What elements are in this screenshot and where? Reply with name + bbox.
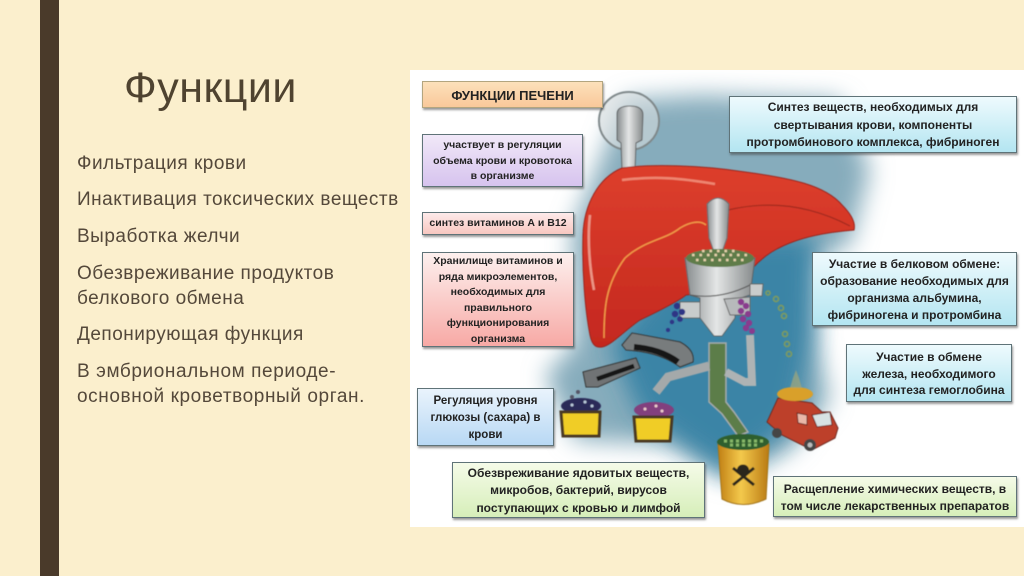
callout: iron metabolism: железа, необходимого <box>862 367 996 381</box>
list item: Обезвреживание продуктов <box>77 263 334 284</box>
callout: iron metabolism: Участие в обмене <box>876 350 982 364</box>
icon: funnel <box>680 249 763 336</box>
icon: crate with blue sugar <box>561 390 601 436</box>
callout: coagulation synthesis <box>729 96 1017 153</box>
icon: pipes <box>656 335 752 436</box>
icon: conveyor lower <box>583 358 640 387</box>
callout: protein metabolism: образование необходимых для <box>820 274 1009 288</box>
callout: vitamin storage <box>422 252 574 347</box>
callout: iron metabolism: для синтеза гемоглобина <box>853 383 1004 397</box>
callout: protein metabolism <box>812 252 1017 326</box>
icon: green droplets <box>766 291 792 356</box>
liver <box>583 166 854 347</box>
list item <box>77 263 334 308</box>
callout: coagulation synthesis: свертывания крови, компоненты <box>774 118 972 132</box>
icon: inner valve <box>707 198 729 252</box>
callout: vitamin synthesis <box>422 212 574 235</box>
callout: glucose regulation <box>417 388 554 446</box>
list item: Депонирующая функция <box>77 324 304 345</box>
icon: crate with purple sugar <box>634 402 674 441</box>
callout: chemical breakdown: Расщепление химических веществ, в <box>784 482 1006 496</box>
icon: conveyor upper <box>622 333 693 367</box>
callout: protein metabolism: организма альбумина, <box>847 291 982 305</box>
callout: blood volume regulation: в организме <box>471 170 534 182</box>
callout: chemical breakdown <box>773 476 1017 517</box>
text block: list of functions <box>77 153 399 406</box>
list item: белкового обмена <box>77 288 244 308</box>
callout: vitamin storage: Хранилище витаминов и <box>433 255 563 267</box>
list item <box>77 361 365 406</box>
icon: red truck <box>767 370 838 451</box>
callout: detoxification: Обезвреживание ядовитых веществ, <box>468 466 689 480</box>
callout: blood volume regulation: объема крови и кровотока <box>433 155 572 167</box>
callout: coagulation synthesis: протромбинового комплекса, фибриноген <box>747 135 999 149</box>
callout: chemical breakdown: том числе лекарственных препаратов <box>781 498 1009 512</box>
list item: основной кроветворный орган. <box>77 386 365 406</box>
liver illustration <box>533 78 884 506</box>
callout: protein metabolism: фибриногена и протромбина <box>828 308 1001 322</box>
callout: blood volume regulation <box>422 134 583 187</box>
callout: protein metabolism: Участие в белковом обмене: <box>829 257 1000 271</box>
list item: В эмбриональном периоде- <box>77 361 336 382</box>
icon: blue granules <box>666 303 685 332</box>
icon: purple granules <box>738 299 755 334</box>
callout: detoxification: поступающих с кровью и лимфой <box>476 501 681 515</box>
panel: liver functions diagram <box>410 70 1024 527</box>
callout: vitamin storage: ряда микроэлементов, <box>439 270 557 282</box>
list item: Фильтрация крови <box>77 153 247 174</box>
heading: liver functions <box>422 81 603 108</box>
callout: vitamin storage: необходимых для <box>451 286 545 298</box>
callout: vitamin synthesis: синтез витаминов А и В12 <box>429 217 567 229</box>
callout: vitamin storage: организма <box>471 332 525 344</box>
icon: toxic barrel <box>717 434 769 504</box>
title: Функции <box>124 64 297 112</box>
icon: top valve <box>599 92 659 170</box>
callout: detoxification <box>452 462 705 518</box>
callout: iron metabolism <box>846 344 1012 402</box>
heading: liver functions: ФУНКЦИИ ПЕЧЕНИ <box>451 88 574 103</box>
blue background wash <box>545 95 870 480</box>
callout: vitamin storage: функционирования <box>447 317 549 329</box>
left vertical bar <box>40 0 59 576</box>
callout: glucose regulation: глюкозы (сахара) в <box>431 412 540 424</box>
callout: coagulation synthesis: Синтез веществ, необходимых для <box>768 100 978 114</box>
list item: Инактивация токсических веществ <box>77 189 399 210</box>
callout: detoxification: микробов, бактерий, вирусов <box>490 483 667 497</box>
callout: vitamin storage: правильного <box>464 302 532 314</box>
callout: blood volume regulation: участвует в регуляции <box>443 139 562 151</box>
list item: Выработка желчи <box>77 226 240 247</box>
callout: glucose regulation: Регуляция уровня <box>434 394 537 406</box>
callout: glucose regulation: крови <box>469 428 502 440</box>
